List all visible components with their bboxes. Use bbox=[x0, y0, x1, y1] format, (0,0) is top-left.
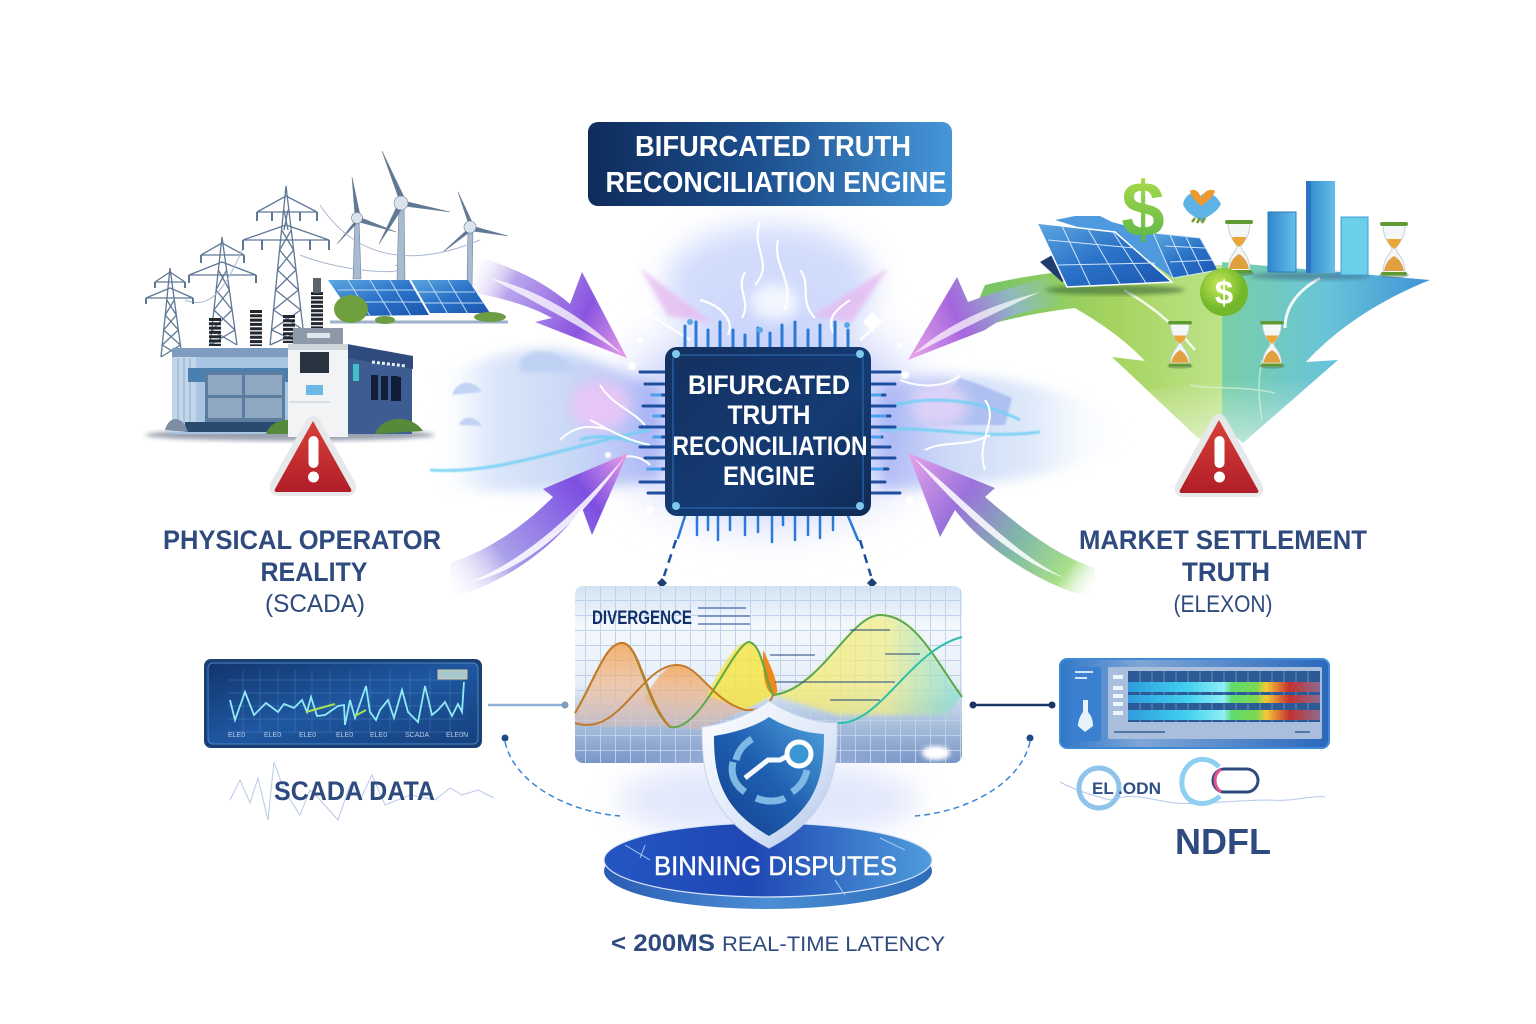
SCADA monitor panel: ELE0 bbox=[299, 732, 316, 739]
NDFL label: NDFL bbox=[1175, 821, 1271, 862]
heading: market settlement truth: (ELEXON) bbox=[1174, 591, 1272, 618]
platform: binning disputes bbox=[604, 823, 932, 909]
central chip: BIFURCATED bbox=[688, 370, 850, 400]
market scene: coin: $ bbox=[1215, 274, 1233, 311]
physical scene: transmission towers bbox=[146, 186, 480, 357]
latency label: < 200MS bbox=[611, 930, 715, 957]
SCADA monitor panel: ELE0 bbox=[264, 732, 281, 739]
physical scene: insulators bbox=[215, 278, 317, 346]
central chip: RECONCILIATION bbox=[672, 431, 868, 461]
ELEXON and NDFL logos bbox=[1060, 759, 1325, 808]
warning icon: physical side bbox=[270, 416, 356, 496]
central energy glow bbox=[430, 222, 1040, 565]
SCADA monitor panel: ELE0 bbox=[228, 732, 245, 739]
divergence chart panel bbox=[575, 586, 962, 763]
heading: physical operator reality: REALITY bbox=[260, 557, 368, 587]
dashed arc: right bbox=[915, 734, 1034, 816]
market scene: dollar sign: $ bbox=[1121, 165, 1165, 253]
central chip bbox=[665, 347, 871, 516]
latency label bbox=[611, 930, 945, 957]
SCADA monitor panel: ELE0 bbox=[370, 732, 387, 739]
chip pins bbox=[640, 319, 900, 542]
shield icon bbox=[702, 701, 837, 848]
title banner bbox=[588, 122, 952, 206]
dashed arc: left bbox=[502, 734, 620, 816]
arrow: bottom right purple to green bbox=[908, 453, 1095, 598]
title banner: BIFURCATED TRUTH bbox=[635, 131, 911, 163]
platform glow bbox=[618, 760, 918, 840]
arrow: SCADA to chart bbox=[488, 702, 568, 708]
market scene: bar chart bbox=[1250, 181, 1370, 280]
central chip: ENGINE bbox=[723, 461, 815, 491]
central chip: TRUTH bbox=[728, 400, 810, 430]
market scene: green and blue funnel arrow bbox=[965, 262, 1430, 443]
SCADA monitor panel: ELE0 bbox=[336, 732, 353, 739]
ELEXON and NDFL logos: EL bbox=[1092, 779, 1114, 798]
physical scene: wind turbines bbox=[337, 151, 508, 286]
dashed connector: chip to chart left bbox=[657, 540, 676, 588]
physical scene: substation building bbox=[145, 328, 435, 441]
arrow: chart to market data bbox=[970, 702, 1056, 708]
SCADA data label with waveform: SCADA DATA bbox=[274, 776, 435, 806]
arrow: bottom left purple bbox=[450, 453, 628, 598]
heading: physical operator reality: PHYSICAL OPERATOR bbox=[163, 525, 441, 555]
SCADA monitor panel bbox=[204, 659, 482, 748]
market scene: hourglasses bbox=[1167, 220, 1409, 369]
dashed connector: chip to chart right bbox=[860, 540, 877, 588]
title banner: RECONCILIATION ENGINE bbox=[606, 167, 946, 199]
market scene: solar panels bbox=[1037, 216, 1218, 295]
heading: market settlement truth bbox=[1079, 525, 1367, 618]
market scene: cloud and heart icon bbox=[1183, 190, 1221, 223]
ELEXON and NDFL logos: .ODN bbox=[1118, 779, 1161, 798]
background cloud band: right bbox=[880, 376, 1135, 490]
warning icon: market side bbox=[1175, 414, 1263, 497]
chart fills and curves bbox=[575, 615, 962, 730]
SCADA monitor panel: SCADA bbox=[405, 732, 429, 739]
market scene: coin bbox=[1200, 268, 1248, 316]
physical scene: solar array bbox=[328, 280, 508, 324]
platform: binning disputes: BINNING DISPUTES bbox=[654, 851, 897, 881]
latency label: REAL-TIME LATENCY bbox=[722, 933, 945, 956]
divergence chart panel: DIVERGENCE bbox=[592, 608, 692, 629]
arrow: top left purple bbox=[470, 255, 627, 358]
heading: physical operator reality bbox=[163, 525, 441, 618]
market heatmap panel bbox=[1060, 659, 1329, 748]
arrow: top right purple to green bbox=[908, 277, 1062, 360]
heading: market settlement truth: MARKET SETTLEMENT bbox=[1079, 525, 1367, 555]
background cloud band: left bbox=[430, 349, 660, 491]
heading: market settlement truth: TRUTH bbox=[1182, 557, 1270, 587]
SCADA monitor panel: ELE0N bbox=[446, 732, 468, 739]
SCADA data label with waveform bbox=[230, 762, 494, 820]
heading: physical operator reality: (SCADA) bbox=[265, 590, 365, 618]
